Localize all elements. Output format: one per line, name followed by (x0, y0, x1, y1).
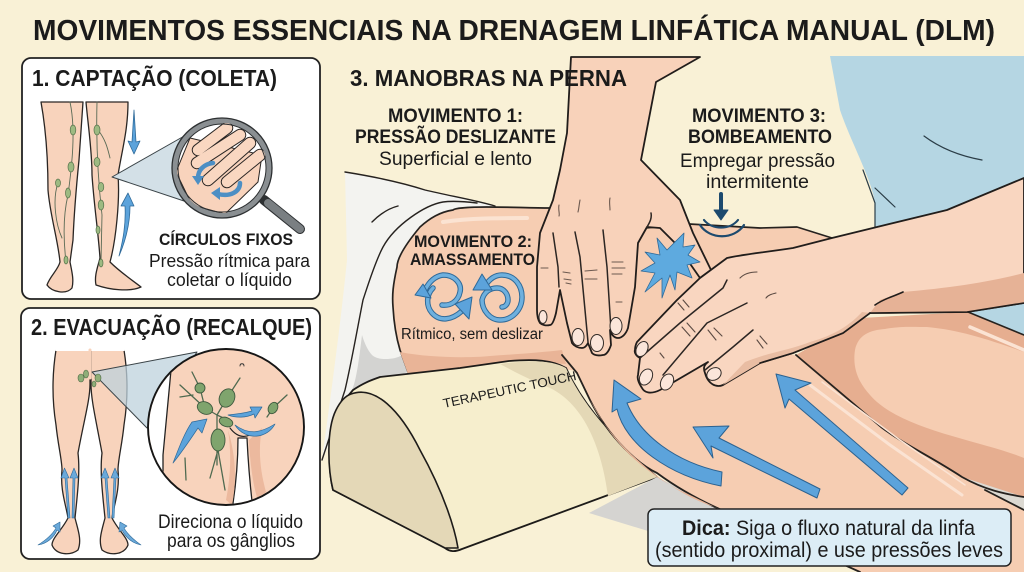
title: MOVIMENTOS ESSENCIAIS NA DRENAGEM LINFÁTICA MANUAL (DLM) (33, 13, 995, 47)
text: círculos fixos (149, 230, 311, 290)
magnifier cone (92, 352, 197, 428)
illustration: legs with upward arrows (38, 350, 141, 554)
icon: pressure star (641, 233, 700, 298)
text: direciona: Direciona o líquido (158, 512, 303, 533)
label: movimento 2: MOVIMENTO 2: (414, 233, 532, 251)
panel 1 heading: 1. CAPTAÇÃO (COLETA) (32, 64, 277, 91)
label: movimento 3: Empregar pressão (680, 151, 835, 172)
label: movimento 2: AMASSAMENTO (410, 251, 535, 269)
hand: lower therapist hand and arm (633, 178, 1024, 393)
therapist shirt (830, 56, 1024, 340)
magnifier cone (112, 135, 196, 205)
arrows up (38, 468, 141, 545)
hand: upper therapist hand (537, 57, 711, 355)
callout: dica: (sentido proximal) e use pressões leves (655, 539, 1003, 562)
groin nodes small (78, 370, 101, 387)
callout: dica (648, 509, 1011, 566)
text: círculos fixos: coletar o líquido (167, 270, 292, 290)
text: direciona (158, 512, 303, 552)
panel 2 heading: 2. EVACUAÇÃO (RECALQUE) (31, 313, 312, 340)
arrow down (128, 110, 140, 154)
flow arrow 2 (693, 426, 820, 498)
label: movimento 1: PRESSÃO DESLIZANTE (355, 125, 556, 148)
text: direciona: para os gânglios (167, 531, 295, 552)
label: movimento 3: BOMBEAMENTO (688, 126, 832, 148)
magnifier (172, 118, 300, 229)
icon: pumping arrow (700, 194, 744, 236)
label: movimento 1 (355, 105, 556, 170)
icon: kneading spirals (415, 274, 522, 320)
bolster label: TERAPEUTIC TOUCH (442, 368, 578, 411)
bolster (329, 360, 657, 551)
callout: dica: Dica: Siga o fluxo natural da linfa (682, 517, 975, 540)
label: movimento 1: Superficial e lento (379, 149, 532, 170)
thigh (394, 208, 829, 370)
illustration: front legs (41, 102, 141, 292)
magnifier: lymph nodes detail (145, 349, 304, 510)
flow arrow 3 (776, 374, 908, 495)
label: movimento 3: intermitente (706, 172, 809, 193)
heading: manobras: 3. MANOBRAS NA PERNA (350, 65, 627, 91)
panel 1: captação (22, 58, 320, 299)
label: movimento 2 (401, 233, 543, 343)
flow arrow 1 (612, 380, 722, 486)
panel: manobras illustration (322, 56, 1024, 572)
far leg (796, 312, 1024, 510)
label: movimento 3: MOVIMENTO 3: (692, 105, 826, 127)
text: círculos fixos: CÍRCULOS FIXOS (159, 230, 293, 249)
label: movimento 3 (680, 105, 835, 193)
towel (322, 172, 495, 460)
label: movimento 2: Rítmico, sem deslizar (401, 326, 543, 343)
arrow up (119, 193, 134, 256)
text: círculos fixos: Pressão rítmica para (149, 251, 311, 271)
panel 2: evacuação (21, 308, 320, 559)
lymph nodes (56, 125, 104, 267)
label: movimento 1: MOVIMENTO 1: (388, 105, 523, 127)
lower leg (562, 345, 1024, 572)
